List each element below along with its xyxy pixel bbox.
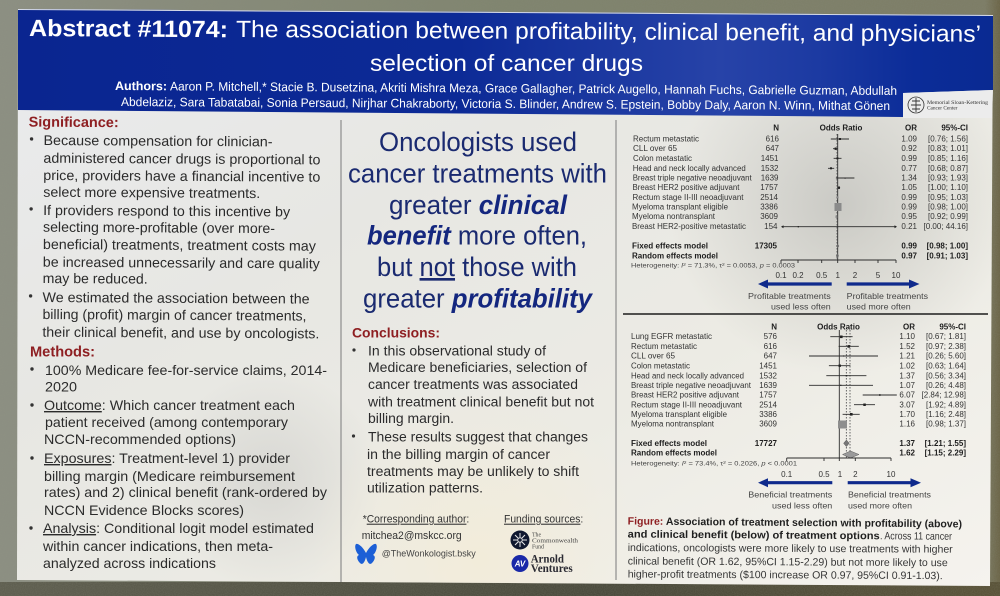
header banner bbox=[18, 9, 993, 117]
OR and CI columns: [1.00; 1.10] bbox=[928, 183, 968, 192]
OR and CI columns: [0.91; 1.03] bbox=[927, 252, 968, 260]
OR and CI columns: 0.21 bbox=[901, 222, 918, 231]
OR and CI columns: [1.21; 1.55] bbox=[925, 439, 966, 448]
axis heading: Odds Ratio bbox=[817, 322, 860, 332]
N column bbox=[755, 322, 778, 448]
axis bbox=[775, 260, 901, 280]
logo: Memorial Sloan-Kettering bbox=[903, 90, 993, 118]
corresponding author block: mitchea2@mskcc.org bbox=[362, 530, 462, 542]
study labels: Myeloma nontransplant bbox=[632, 212, 716, 221]
OR and CI columns: [0.98; 1.00] bbox=[928, 202, 968, 212]
arrow: profitable treatments used more often: used more often bbox=[847, 302, 911, 312]
bullet text: methods: rates) and 2) clinical benefit (rank-ordered by bbox=[44, 484, 327, 500]
authors: Authors: bbox=[115, 79, 167, 93]
N column: 154 bbox=[764, 222, 778, 231]
N column: 576 bbox=[764, 332, 778, 341]
title: The association between profitability, clinical benefit, and physicians’ bbox=[236, 16, 981, 47]
title: selection of cancer drugs bbox=[370, 50, 643, 76]
bullet text: conclusions: with treatment clinical benefit but not bbox=[367, 395, 594, 410]
plot marks bbox=[781, 134, 897, 260]
icon: butterfly bbox=[355, 544, 377, 564]
bullet text: methods: Analysis: Conditional logit model estimated bbox=[43, 520, 314, 536]
N column: 3386 bbox=[760, 202, 779, 212]
axis: 10 bbox=[892, 271, 901, 280]
bullet text: significance: may be reduced. bbox=[43, 270, 148, 287]
OR and CI columns: OR bbox=[903, 322, 915, 332]
OR and CI columns: [0.26; 4.48] bbox=[926, 381, 966, 390]
study labels: Myeloma nontransplant bbox=[631, 420, 715, 428]
study labels: Rectum metastatic bbox=[631, 342, 697, 351]
bullet text: methods: NCCN Evidence Blocks scores) bbox=[44, 502, 244, 518]
arrow: beneficial treatments used less often: used less often bbox=[772, 500, 833, 510]
bullet text: conclusions: in the billing margin of cancer bbox=[367, 447, 551, 462]
arrow: profitable treatments used more often: Profitable treatments bbox=[847, 291, 928, 301]
arrow: profitable treatments used less often bbox=[748, 280, 832, 312]
study labels: Rectum metastatic bbox=[633, 134, 699, 144]
logo: The Commonwealth Fund: Commonwealth bbox=[532, 538, 578, 544]
study labels: Myeloma transplant eligible bbox=[632, 202, 729, 212]
arrow: beneficial treatments used more often: used more often bbox=[848, 500, 912, 510]
N column: 1639 bbox=[759, 381, 778, 390]
authors bbox=[115, 79, 897, 113]
OR and CI columns: [0.83; 1.01] bbox=[928, 144, 968, 153]
panel: methods bbox=[29, 345, 327, 571]
N column: 616 bbox=[764, 342, 778, 351]
study labels: Colon metastatic bbox=[633, 154, 692, 163]
OR and CI columns: 1.10 bbox=[899, 332, 916, 341]
bullet text: methods: 100% Medicare fee-for-service claims, 2014- bbox=[45, 362, 327, 378]
N column: 1532 bbox=[759, 371, 778, 380]
OR and CI columns bbox=[899, 322, 966, 458]
OR and CI columns: 0.95 bbox=[901, 212, 918, 221]
logo: Arnold Ventures: Arnold bbox=[531, 554, 565, 566]
axis: 0.1 bbox=[781, 470, 793, 479]
OR and CI columns: [0.92; 0.99] bbox=[928, 212, 968, 221]
OR and CI columns: 1.52 bbox=[899, 342, 916, 351]
bullet text: significance: be increased unnecessarily and care quality bbox=[43, 254, 320, 271]
logo: The Commonwealth Fund bbox=[510, 530, 578, 550]
arrow: beneficial treatments used less often: Beneficial treatments bbox=[748, 489, 832, 499]
N column: 1639 bbox=[761, 174, 779, 182]
study labels: Head and neck locally advanced bbox=[633, 164, 746, 173]
OR and CI columns: 3.07 bbox=[899, 400, 916, 409]
logo: The Commonwealth Fund: The bbox=[532, 532, 541, 538]
OR and CI columns: 1.37 bbox=[899, 439, 916, 448]
bullet text: methods: within cancer indications, then meta- bbox=[42, 538, 273, 554]
bullet text: conclusions bbox=[352, 344, 594, 496]
study labels: Rectum stage II-III neoadjuvant bbox=[632, 193, 744, 202]
OR and CI columns bbox=[901, 124, 968, 260]
study labels: Breast HER2 positive adjuvant bbox=[632, 183, 740, 192]
key message headline: greater profitability bbox=[363, 284, 593, 314]
OR and CI columns: [0.93; 1.93] bbox=[928, 174, 968, 182]
axis: 2 bbox=[853, 271, 858, 280]
axis: 0.1 bbox=[775, 271, 787, 280]
figure caption bbox=[628, 516, 962, 582]
N column: N bbox=[771, 322, 777, 332]
bullet text: methods: analyzed across indications bbox=[43, 555, 216, 571]
logo: Arnold Ventures bbox=[512, 554, 573, 575]
OR and CI columns: [1.15; 2.29] bbox=[925, 448, 966, 458]
OR and CI columns: 1.16 bbox=[899, 420, 916, 428]
bullet text: conclusions: Medicare beneficiaries, selection of bbox=[368, 360, 587, 375]
axis: 0.2 bbox=[792, 271, 804, 280]
OR and CI columns: [0.95; 1.03] bbox=[928, 193, 968, 202]
bullet text: methods: billing margin (Medicare reimbursement bbox=[44, 468, 295, 484]
key message headline: cancer treatments with bbox=[348, 159, 607, 189]
figure caption: indications, oncologists were more likely to use treatments with higher bbox=[628, 542, 953, 556]
bullet text: methods: patient received (among contemporary bbox=[45, 414, 288, 430]
bullet text: methods: NCCN-recommended options) bbox=[44, 431, 236, 447]
N column: 17727 bbox=[755, 439, 778, 448]
study labels: Fixed effects model bbox=[631, 439, 707, 448]
key message headline bbox=[348, 127, 607, 314]
logo: The Commonwealth Fund: Fund bbox=[532, 544, 544, 550]
OR and CI columns: 1.05 bbox=[901, 183, 918, 192]
study labels: Breast HER2-positive metastatic bbox=[632, 222, 746, 231]
heading: methods: Methods: bbox=[30, 345, 95, 361]
heading: conclusions: Conclusions: bbox=[352, 326, 440, 341]
OR and CI columns: [2.84; 12.98] bbox=[922, 390, 966, 400]
key message headline: greater clinical bbox=[389, 190, 568, 220]
bullet text: significance: selecting more-profitable (over more- bbox=[43, 219, 275, 236]
N column: 2514 bbox=[760, 193, 779, 202]
OR and CI columns: [0.63; 1.64] bbox=[926, 361, 966, 370]
OR and CI columns: 6.07 bbox=[899, 390, 916, 400]
N column: 616 bbox=[766, 134, 780, 144]
OR and CI columns: 1.07 bbox=[899, 381, 916, 390]
OR and CI columns: [1.16; 2.48] bbox=[926, 410, 966, 419]
logo: Memorial Sloan-Kettering: Cancer Center bbox=[927, 106, 958, 112]
bullet text: conclusions: cancer treatments was associated bbox=[368, 377, 578, 392]
N column: N bbox=[773, 124, 779, 132]
axis: 0.5 bbox=[816, 271, 828, 280]
arrow: profitable treatments used less often: Profitable treatments bbox=[748, 291, 831, 301]
N column: 1757 bbox=[760, 183, 779, 192]
OR and CI columns: 1.02 bbox=[899, 361, 916, 370]
OR and CI columns: [0.56; 3.34] bbox=[926, 371, 966, 380]
OR and CI columns: 0.99 bbox=[901, 154, 918, 163]
N column: 3609 bbox=[759, 420, 778, 428]
axis: 0.5 bbox=[818, 470, 830, 479]
panel: conclusions bbox=[352, 326, 594, 496]
bullet text: conclusions: utilization patterns. bbox=[367, 481, 483, 496]
OR and CI columns: 1.62 bbox=[899, 448, 916, 458]
bullet text: methods: Outcome: Which cancer treatment each bbox=[44, 397, 295, 413]
panel: significance bbox=[27, 115, 321, 341]
study labels bbox=[631, 332, 797, 468]
N column: 647 bbox=[764, 352, 778, 360]
OR and CI columns: 95%-CI bbox=[939, 322, 966, 332]
forest plot: profitability bbox=[631, 124, 968, 312]
study labels: Random effects model bbox=[632, 252, 718, 260]
logo: Arnold Ventures: Ventures bbox=[531, 563, 573, 575]
figure caption: and clinical benefit (below) of treatment options bbox=[628, 529, 880, 542]
corresponding author block: @TheWonkologist.bsky bbox=[382, 549, 476, 559]
OR and CI columns: 0.77 bbox=[901, 164, 918, 173]
study labels: Heterogeneity: I² = 71.3%, τ² = 0.0053, p = 0.0003 bbox=[631, 262, 795, 270]
OR and CI columns: 1.09 bbox=[901, 134, 918, 144]
figure caption: . Across 11 cancer bbox=[880, 530, 952, 543]
study labels: Head and neck locally advanced bbox=[631, 371, 744, 380]
bullet text: significance: their clinical benefit, and use by oncologists. bbox=[42, 324, 319, 341]
N column: 3386 bbox=[759, 410, 778, 419]
N column: 1451 bbox=[759, 361, 778, 370]
OR and CI columns: [0.26; 5.60] bbox=[926, 352, 966, 360]
forest plot: clinical benefit bbox=[631, 322, 966, 510]
bullet text: methods bbox=[29, 362, 327, 571]
OR and CI columns: 0.92 bbox=[901, 144, 918, 153]
bullet text: significance: We estimated the association between the bbox=[43, 289, 310, 307]
OR and CI columns: 0.97 bbox=[901, 252, 918, 260]
figure caption: Figure: Association of treatment selection with profitability (above) bbox=[628, 516, 962, 530]
bullet text: methods: 2020 bbox=[45, 379, 77, 395]
N column: 647 bbox=[766, 144, 780, 153]
corresponding author block: *Corresponding author: bbox=[363, 514, 469, 526]
bullet text: significance: Because compensation for clinician- bbox=[44, 132, 273, 149]
study labels: Breast triple negative neoadjuvant bbox=[631, 381, 752, 390]
bullet text: significance bbox=[29, 132, 321, 341]
bullet text: conclusions: billing margin. bbox=[368, 411, 454, 426]
N column: 3609 bbox=[760, 212, 779, 221]
N column: 1532 bbox=[761, 164, 779, 173]
arrow: profitable treatments used less often: used less often bbox=[771, 302, 831, 312]
plot marks bbox=[809, 330, 897, 458]
OR and CI columns: [0.00; 44.16] bbox=[924, 222, 968, 231]
OR and CI columns: [0.67; 1.81] bbox=[926, 332, 966, 341]
arrow: profitable treatments used more often bbox=[847, 280, 928, 312]
OR and CI columns: 1.21 bbox=[899, 352, 916, 360]
OR and CI columns: 95%-CI bbox=[941, 124, 968, 132]
OR and CI columns: [1.92; 4.89] bbox=[926, 400, 966, 409]
study labels: Rectum stage II-III neoadjuvant bbox=[631, 400, 743, 409]
bullet text: methods: Exposures: Treatment-level 1) provider bbox=[44, 450, 290, 466]
logo: Memorial Sloan-Kettering: Memorial Sloan-Kettering bbox=[927, 100, 988, 106]
N column bbox=[755, 124, 780, 250]
bullet text: significance: price, providers have a financial incentive to bbox=[43, 167, 321, 185]
bullet text: conclusions: treatments may be unlikely to shift bbox=[367, 464, 579, 479]
funding sources block: Funding sources: bbox=[504, 514, 583, 526]
axis: 1 bbox=[838, 470, 843, 479]
title bbox=[29, 15, 981, 76]
study labels: Myeloma transplant eligible bbox=[631, 410, 728, 419]
study labels: CLL over 65 bbox=[633, 144, 678, 153]
study labels: Fixed effects model bbox=[632, 242, 708, 250]
N column: 1451 bbox=[761, 154, 779, 163]
bullet text: significance: beneficial) treatments, treatment costs may bbox=[43, 236, 316, 254]
bullet text: significance: billing (profit) margin of cancer treatments, bbox=[42, 306, 307, 324]
axis: 1 bbox=[835, 271, 840, 280]
OR and CI columns: [0.98; 1.37] bbox=[926, 420, 966, 428]
figure caption: clinical benefit (OR 1.62, 95%CI 1.15-2.29) but not more likely to use bbox=[628, 556, 948, 569]
arrow: beneficial treatments used more often: Beneficial treatments bbox=[848, 489, 931, 499]
OR and CI columns: 0.99 bbox=[901, 202, 918, 212]
study labels: Heterogeneity: I² = 73.4%, τ² = 0.2026, p < 0.0001 bbox=[631, 460, 797, 468]
key message headline: but not those with bbox=[377, 252, 577, 282]
OR and CI columns: [0.68; 0.87] bbox=[928, 164, 968, 173]
OR and CI columns: 1.70 bbox=[899, 410, 916, 419]
N column: 1757 bbox=[759, 390, 778, 400]
study labels: Breast triple negative neoadjuvant bbox=[633, 174, 752, 182]
OR and CI columns: [0.98; 1.00] bbox=[927, 242, 968, 250]
study labels: Colon metastatic bbox=[631, 361, 690, 370]
authors: Aaron P. Mitchell,* Stacie B. Dusetzina, Akriti Mishra Meza, Grace Gallagher, Patrick Augello, Hannah Fuchs, Gabrielle Guzman, Abdullah bbox=[170, 79, 897, 98]
OR and CI columns: [0.85; 1.16] bbox=[928, 154, 968, 163]
arrow: beneficial treatments used more often bbox=[848, 478, 931, 510]
study labels: Random effects model bbox=[631, 448, 717, 458]
axis: 2 bbox=[853, 470, 858, 479]
study labels: Lung EGFR metastatic bbox=[631, 332, 712, 341]
column dividers bbox=[341, 120, 616, 582]
title: Abstract #11074: bbox=[29, 15, 228, 42]
N column: 2514 bbox=[759, 400, 778, 409]
heading: significance: Significance: bbox=[29, 115, 119, 131]
key message headline: benefit more often, bbox=[367, 220, 587, 250]
study labels bbox=[631, 134, 795, 270]
axis bbox=[781, 458, 896, 479]
bullet text: significance: If providers respond to this incentive by bbox=[43, 202, 290, 220]
study labels: CLL over 65 bbox=[631, 352, 676, 360]
OR and CI columns: 1.37 bbox=[899, 371, 916, 380]
arrow: beneficial treatments used less often bbox=[748, 478, 833, 510]
bullet text: conclusions: These results suggest that changes bbox=[368, 430, 588, 445]
bullet text: significance: administered cancer drugs is proportional to bbox=[43, 150, 321, 167]
logo: Arnold Ventures: AV bbox=[514, 560, 526, 568]
N column: 17305 bbox=[755, 242, 778, 250]
key message headline: Oncologists used bbox=[379, 127, 577, 157]
divider between forest plots bbox=[623, 313, 988, 315]
axis heading: Odds Ratio bbox=[820, 124, 862, 132]
bullet text: significance: select more expensive treatments. bbox=[43, 184, 260, 201]
corresponding author block bbox=[355, 514, 476, 564]
bullet text: conclusions: In this observational study of bbox=[368, 344, 546, 359]
OR and CI columns: 1.34 bbox=[901, 174, 918, 182]
funding sources block bbox=[504, 514, 583, 575]
figure caption: higher-profit treatments ($100 increase OR 0.97, 95%CI 0.91-1.03). bbox=[628, 569, 943, 582]
axis: 10 bbox=[887, 470, 896, 479]
OR and CI columns: 0.99 bbox=[901, 193, 918, 202]
OR and CI columns: [0.76; 1.56] bbox=[928, 134, 968, 144]
study labels: Breast HER2 positive adjuvant bbox=[631, 390, 740, 400]
OR and CI columns: 0.99 bbox=[901, 242, 918, 250]
authors: Abdelaziz, Sara Tabatabai, Sonia Persaud, Nirjhar Chakraborty, Victoria S. Blinder, Andrew S. Epstein, Bobby Daly, Aaron N. Winn, Mithat Gönen bbox=[121, 95, 890, 113]
axis: 5 bbox=[876, 271, 881, 280]
OR and CI columns: [0.97; 2.38] bbox=[926, 342, 966, 351]
OR and CI columns: OR bbox=[905, 124, 917, 132]
